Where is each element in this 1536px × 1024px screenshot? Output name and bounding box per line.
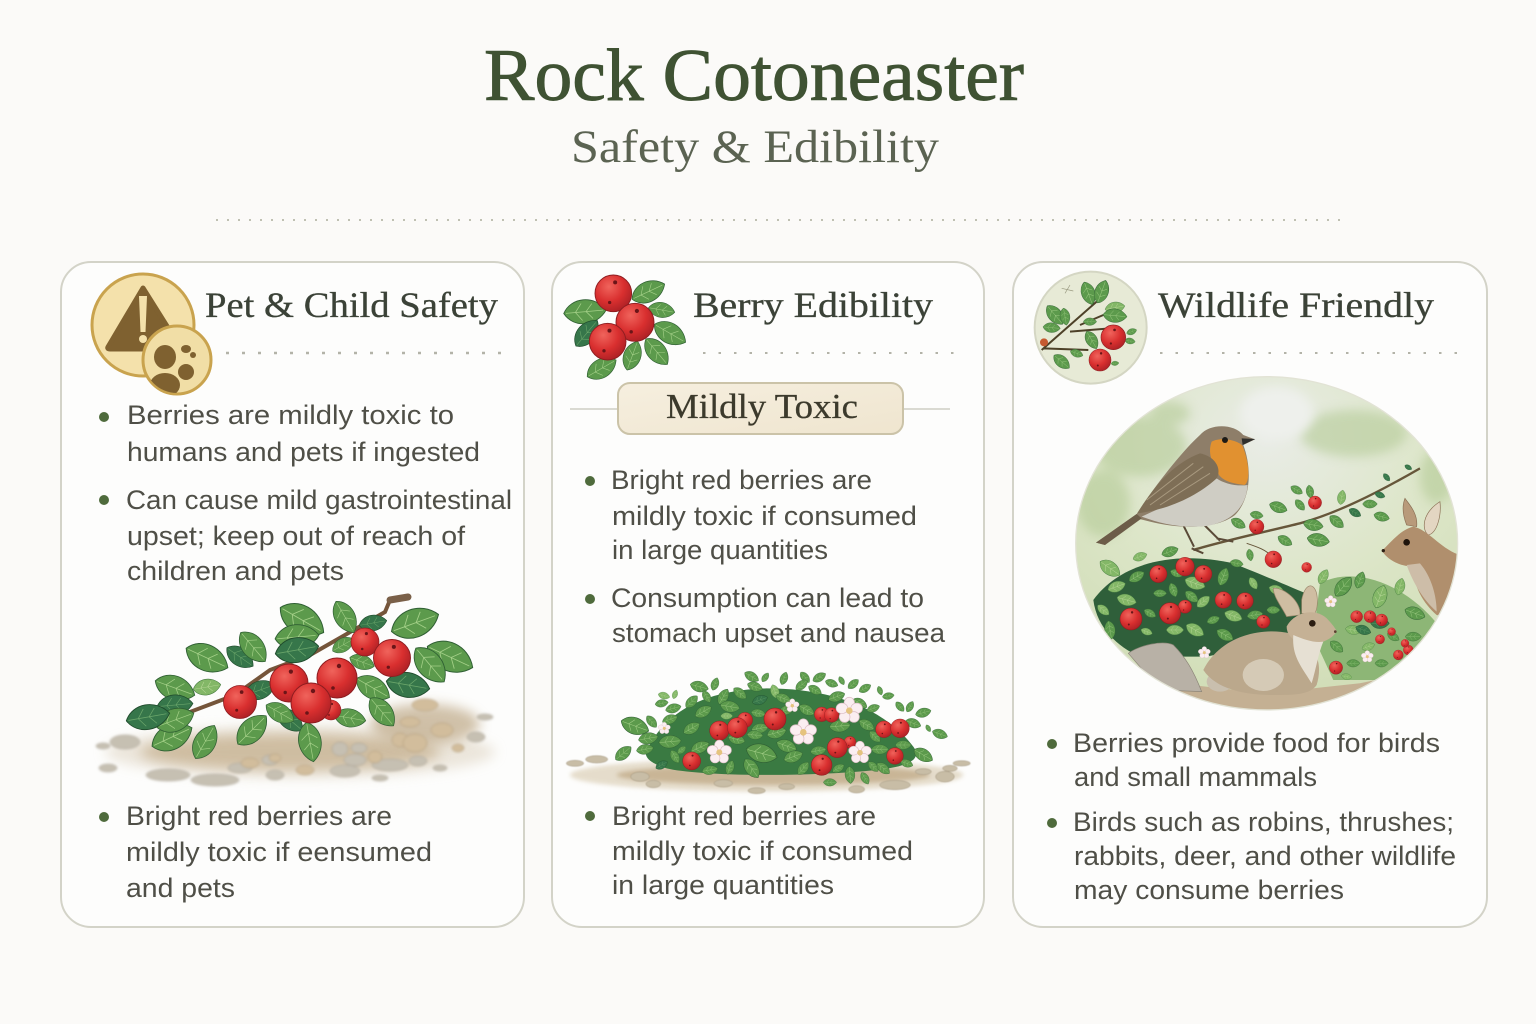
bullet list: wildlife: Birds such as robins, thrushes;: [1073, 807, 1454, 837]
bullet list: wildlife: may consume berries: [1074, 875, 1344, 905]
bullet list: toxicity: upset; keep out of reach of: [127, 521, 466, 551]
bullet list: edibility: [585, 465, 946, 648]
panel: berry edibility: [552, 262, 984, 927]
badge: mildly toxic: [618, 383, 903, 434]
heading: Pet & Child Safety: [205, 285, 498, 325]
rock: [1128, 643, 1202, 692]
title: Rock Cotoneaster: [484, 35, 1024, 117]
bullet list: wildlife: [1047, 728, 1456, 905]
icon: berry sprig badge: [1035, 272, 1147, 384]
heading: Berry Edibility: [693, 285, 933, 325]
bullet list: edibility: mildly toxic if consumed: [612, 501, 917, 531]
illustration: berry branch on gravel: [96, 595, 495, 786]
heading: Wildlife Friendly: [1158, 285, 1434, 325]
bullet list: warning: mildly toxic if eensumed: [126, 837, 432, 867]
panel: pet and child safety: [61, 262, 524, 927]
badge: mildly toxic: Mildly Toxic: [666, 387, 858, 426]
deer: [1382, 498, 1456, 616]
rabbit: [1203, 586, 1337, 695]
bullet list: edibility: stomach upset and nausea: [612, 618, 946, 648]
bullet list: toxicity: Berries are mildly toxic to: [127, 400, 454, 430]
robin: [1096, 426, 1420, 557]
bullet list: warning: [99, 801, 432, 903]
bullet list: wildlife: Berries provide food for birds: [1073, 728, 1440, 758]
bullet list: wildlife: and small mammals: [1074, 762, 1317, 792]
bullet list: repeat warning: mildly toxic if consumed: [612, 836, 913, 866]
bullet list: wildlife: rabbits, deer, and other wildlife: [1074, 841, 1456, 871]
bullet list: repeat warning: Bright red berries are: [612, 801, 876, 831]
bullet list: edibility: Bright red berries are: [611, 465, 872, 495]
bullet list: toxicity: Can cause mild gastrointestinal: [126, 485, 512, 515]
illustration: flowering shrub: [566, 669, 970, 794]
branch leaves and berries: [1120, 463, 1413, 674]
panel: wildlife friendly: [1013, 262, 1487, 927]
bullet list: toxicity: humans and pets if ingested: [127, 437, 480, 467]
bullet list: repeat warning: in large quantities: [612, 870, 834, 900]
infographic: [60, 48, 1488, 928]
subtitle: Safety & Edibility: [571, 121, 940, 173]
icon: warning triangle and paw badge: [92, 274, 211, 397]
bullet list: repeat warning: [585, 801, 913, 900]
bullet list: edibility: in large quantities: [612, 535, 828, 565]
bullet list: edibility: Consumption can lead to: [611, 583, 924, 613]
bullet list: toxicity: children and pets: [127, 556, 344, 586]
icon: berry cluster: [563, 275, 691, 385]
bullet list: warning: and pets: [126, 873, 235, 903]
illustration: robin, rabbit and deer vignette: [1075, 376, 1458, 711]
bullet list: toxicity: [99, 400, 512, 586]
bullet list: warning: Bright red berries are: [126, 801, 392, 831]
